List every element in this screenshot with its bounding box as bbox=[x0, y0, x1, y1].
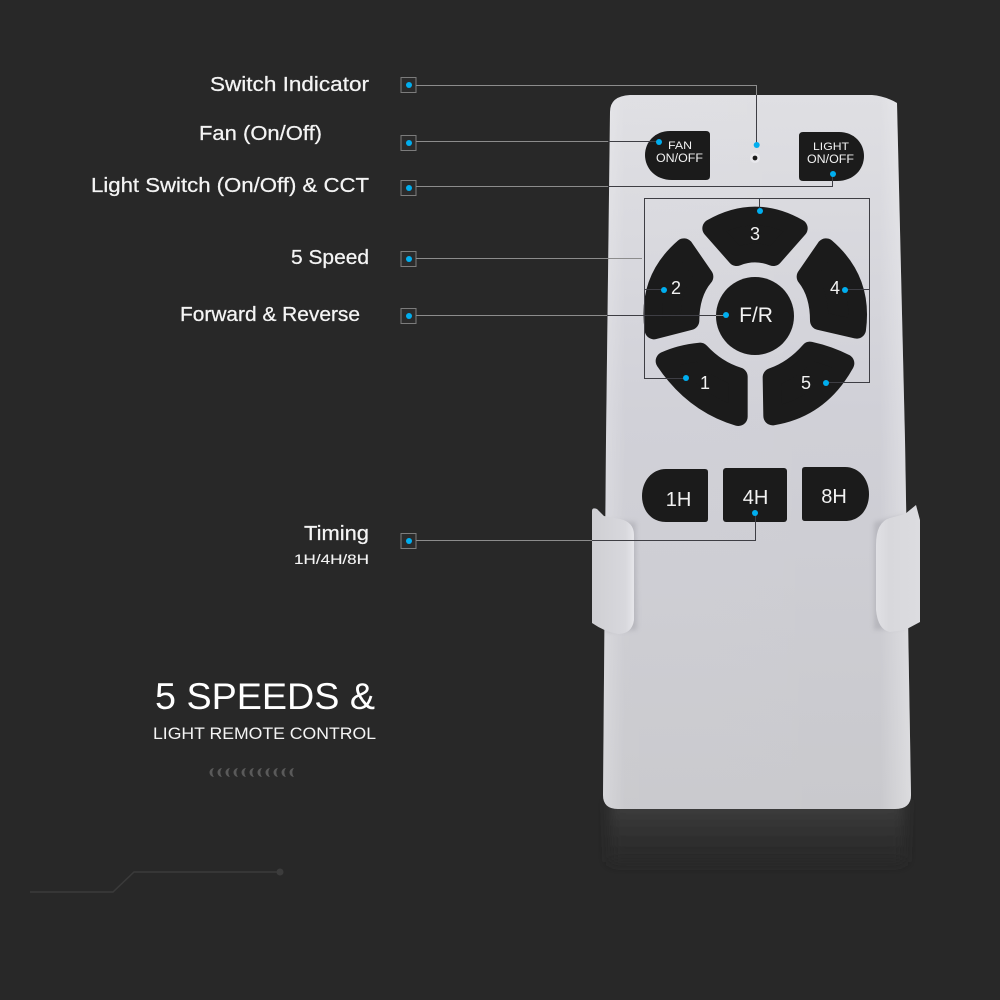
button: speed 2 bbox=[653, 248, 704, 330]
speed buttons bbox=[653, 216, 858, 417]
button: light on/off: ON/OFF bbox=[807, 154, 854, 166]
decorative circuit line bbox=[30, 868, 284, 892]
speed buttons: 1 bbox=[700, 373, 710, 393]
button: speed 4 bbox=[806, 248, 858, 329]
button: fan on/off bbox=[645, 131, 710, 180]
right clip bbox=[876, 505, 920, 632]
button: fan on/off: FAN bbox=[668, 140, 692, 152]
button: light on/off: LIGHT bbox=[813, 141, 849, 153]
callout: switch indicator bbox=[401, 78, 760, 148]
label: Forward & Reverse: Forward & Reverse bbox=[180, 304, 360, 326]
button: timer 1H bbox=[642, 469, 708, 522]
button: light on/off bbox=[799, 132, 864, 181]
subtitle: LIGHT REMOTE CONTROL: LIGHT REMOTE CONTROL bbox=[153, 724, 376, 743]
callout labels bbox=[91, 74, 369, 567]
callout: light switch bbox=[401, 171, 836, 196]
callout: 5 speed bbox=[401, 198, 870, 386]
decorative chevrons bbox=[210, 768, 294, 777]
callout: fan bbox=[401, 136, 662, 150]
label: 1H/4H/8H: 1H/4H/8H bbox=[294, 551, 369, 567]
speed buttons: 3 bbox=[750, 224, 760, 244]
callout: forward and reverse bbox=[401, 308, 729, 324]
speed buttons: F/R bbox=[739, 304, 773, 327]
button: forward/reverse bbox=[716, 277, 794, 355]
title: 5 SPEEDS &: 5 SPEEDS & bbox=[155, 676, 375, 717]
button: fan on/off: ON/OFF bbox=[656, 153, 703, 165]
button: timer 4H bbox=[723, 468, 787, 522]
label: Fan (On/Off): Fan (On/Off) bbox=[199, 123, 322, 145]
speed buttons: 5 bbox=[801, 373, 811, 393]
label: 5 Speed: 5 Speed bbox=[291, 247, 369, 269]
left clip bbox=[592, 508, 634, 634]
button: timer 8H: 8H bbox=[821, 486, 847, 508]
button: speed 3 bbox=[712, 216, 798, 257]
remote body bbox=[603, 95, 911, 809]
remote reflection bbox=[610, 800, 904, 862]
button: timer 8H bbox=[802, 467, 869, 521]
speed buttons: 2 bbox=[671, 278, 681, 298]
label: Light Switch (On/Off) & CCT: Light Switch (On/Off) & CCT bbox=[91, 175, 369, 197]
title block bbox=[153, 676, 376, 743]
indicator LED bbox=[750, 153, 760, 163]
remote control bbox=[592, 95, 920, 809]
button: timer 1H: 1H bbox=[666, 489, 691, 511]
speed buttons: 4 bbox=[830, 278, 840, 298]
label: Timing: Timing bbox=[304, 523, 369, 545]
button: speed 1 bbox=[665, 352, 738, 417]
label: Switch Indicator: Switch Indicator bbox=[210, 74, 369, 96]
button: speed 5 bbox=[772, 351, 845, 416]
callout: timing bbox=[401, 510, 758, 548]
clip shadows bbox=[604, 515, 905, 632]
button: timer 4H: 4H bbox=[743, 487, 768, 509]
